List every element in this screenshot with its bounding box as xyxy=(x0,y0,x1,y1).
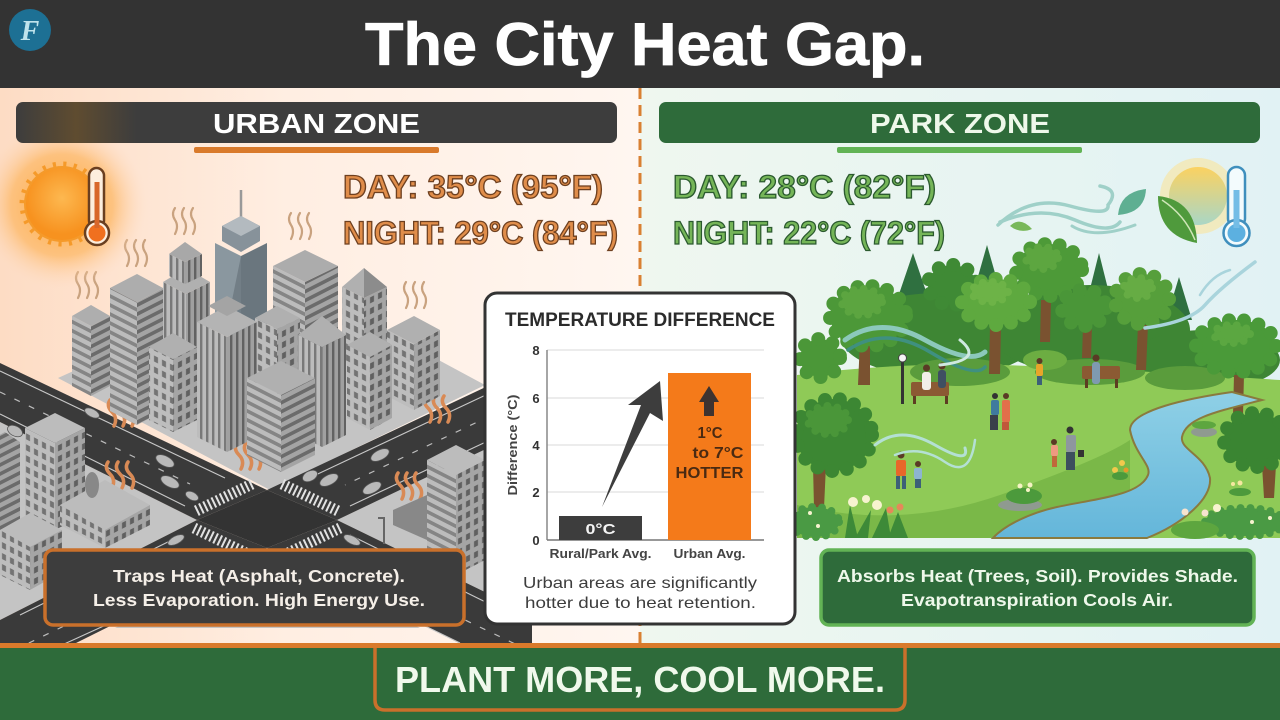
tree trunks xyxy=(813,300,1276,508)
footer banner xyxy=(0,643,1280,720)
park temperatures xyxy=(673,169,945,251)
park temperatures: NIGHT: 22°C (72°F) xyxy=(673,215,945,251)
bar: urban: 1°C xyxy=(698,425,723,442)
gridlines and axis: 8 xyxy=(532,343,540,358)
ribbed tower xyxy=(298,316,346,447)
tall tiered tower xyxy=(163,242,210,360)
callout: urban causes: Less Evaporation. High Energy Use. xyxy=(93,590,425,610)
x axis labels xyxy=(550,546,746,561)
tree canopy group xyxy=(796,244,1280,471)
call to action: PLANT MORE, COOL MORE. xyxy=(395,659,885,700)
chart caption: Urban areas are significantly xyxy=(523,575,757,592)
tall striped tower xyxy=(110,274,163,425)
callout: park benefits xyxy=(821,550,1254,625)
darker lawn near river xyxy=(797,440,1130,538)
gridlines and axis: 0 xyxy=(532,533,540,548)
back bushes xyxy=(910,350,1225,390)
chart caption: hotter due to heat retention. xyxy=(525,595,756,612)
road network xyxy=(0,363,532,657)
icon: cool sun, leaf and thermometer xyxy=(1158,158,1250,246)
flower beds and rocks xyxy=(791,421,1280,539)
right foreground buildings xyxy=(378,445,485,575)
gridlines and axis xyxy=(532,343,764,548)
growth arrow xyxy=(602,381,663,507)
heading: urban zone xyxy=(16,102,617,153)
left window tower xyxy=(149,333,197,432)
cars on roads xyxy=(6,406,391,548)
bar: urban xyxy=(668,373,751,540)
icon: hot sun with thermometer xyxy=(0,120,147,290)
skyscraper with spire xyxy=(215,190,267,340)
urban temperatures xyxy=(343,169,618,251)
icon: wind and leaves xyxy=(998,186,1146,233)
logo: F xyxy=(20,16,40,47)
callout: park benefits: Evapotranspiration Cools Air. xyxy=(901,590,1173,610)
lawn xyxy=(797,364,1280,538)
logo xyxy=(9,9,51,51)
gridlines and axis: 6 xyxy=(532,391,540,406)
y axis label: Difference (°C) xyxy=(505,394,520,496)
benches with people xyxy=(911,354,1120,404)
right tower xyxy=(387,316,440,410)
lower window tower xyxy=(347,332,392,430)
small striped tower xyxy=(72,305,110,396)
panel: urban background xyxy=(0,88,640,645)
chart caption xyxy=(523,575,757,612)
heading: title: The City Heat Gap. xyxy=(365,11,925,78)
canopy backdrop xyxy=(840,285,1280,390)
bar: rural/park: 0°C xyxy=(586,521,616,538)
left foreground buildings xyxy=(0,413,150,590)
lamp post xyxy=(898,354,906,404)
bar: urban: to 7°C xyxy=(692,445,744,462)
road heat waves xyxy=(106,396,450,499)
x axis labels: Rural/Park Avg. xyxy=(550,546,652,561)
callout: urban causes: Traps Heat (Asphalt, Concrete). xyxy=(113,566,405,586)
callout: urban causes xyxy=(45,550,464,625)
x axis labels: Urban Avg. xyxy=(674,546,746,561)
striped office block xyxy=(273,250,338,360)
gridlines and axis: 4 xyxy=(532,438,540,453)
heat waves above towers xyxy=(76,208,426,308)
heading: urban zone: URBAN ZONE xyxy=(213,108,420,139)
callout: park benefits: Absorbs Heat (Trees, Soil). Provides Shade. xyxy=(837,566,1238,586)
river xyxy=(993,392,1262,538)
center divider xyxy=(638,88,642,645)
bar: urban: HOTTER xyxy=(676,465,744,482)
panel: temperature difference chart xyxy=(485,293,795,624)
front striped block xyxy=(247,361,315,472)
title bar xyxy=(0,0,1280,88)
back pines xyxy=(893,245,1198,352)
people in park xyxy=(896,358,1084,489)
panel: park background xyxy=(640,88,1280,645)
urban temperatures: DAY: 35°C (95°F) xyxy=(343,169,603,205)
heading: park zone: PARK ZONE xyxy=(870,108,1050,139)
park wind swirls xyxy=(845,262,1255,467)
window tower xyxy=(255,306,300,400)
park temperatures: DAY: 28°C (82°F) xyxy=(673,169,936,205)
illustration: isometric city xyxy=(0,190,532,657)
gridlines and axis: 2 xyxy=(532,485,540,500)
chart title: TEMPERATURE DIFFERENCE xyxy=(505,310,775,331)
urban temperatures: NIGHT: 29°C (84°F) xyxy=(343,215,618,251)
pyramid roof tower xyxy=(342,268,387,370)
city ground xyxy=(0,350,532,628)
heading: park zone xyxy=(659,102,1260,153)
central ribbed tower xyxy=(197,296,257,452)
park illustration xyxy=(791,244,1280,539)
bar: rural/park xyxy=(559,516,642,540)
